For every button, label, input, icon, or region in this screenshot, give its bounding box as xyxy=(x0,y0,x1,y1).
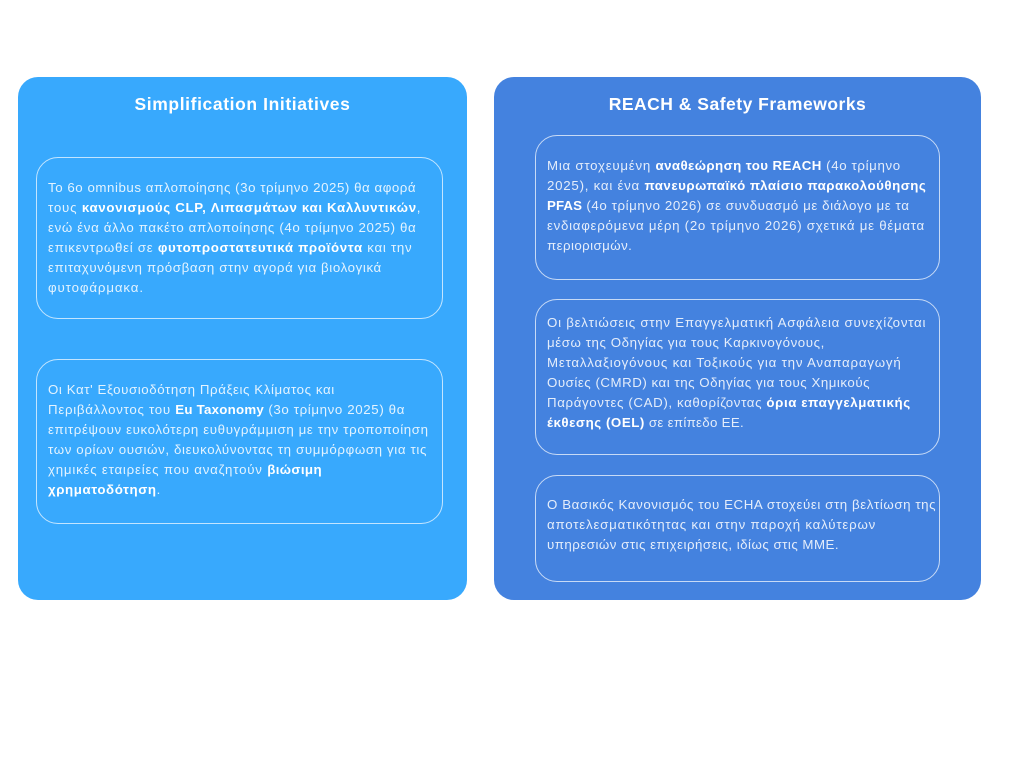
text: occupational safety: έκθεσης (OEL) σε επίπεδο ΕΕ. xyxy=(547,415,744,430)
card: eu taxonomy xyxy=(36,359,443,524)
text: 6th omnibus xyxy=(48,180,421,295)
text: echa regulation xyxy=(547,497,936,552)
text: 6th omnibus: τους κανονισμούς CLP, Λιπασμάτων και Καλλυντικών, xyxy=(48,200,421,215)
text: occupational safety: Οι βελτιώσεις στην Επαγγελματική Ασφάλεια συνεχίζονται xyxy=(547,315,926,330)
heading: reach and safety frameworks: REACH & Safety Frameworks xyxy=(609,94,866,114)
text: echa regulation: αποτελεσματικότητας και στην παροχή καλύτερων xyxy=(547,517,876,532)
text: 6th omnibus: επιταχυνόμενη πρόσβαση στην αγορά για βιολογικά xyxy=(48,260,382,275)
text: occupational safety: Παράγοντες (CAD), καθορίζοντας όρια επαγγελματικής xyxy=(547,395,911,410)
card: echa regulation xyxy=(535,475,940,582)
text: occupational safety: Ουσίες (CMRD) και της Οδηγίας για τους Χημικούς xyxy=(547,375,870,390)
text: 6th omnibus: Το 6ο omnibus απλοποίησης (3ο τρίμηνο 2025) θα αφορά xyxy=(48,180,416,195)
text: occupational safety: Μεταλλαξιογόνους και Τοξικούς για την Αναπαραγωγή xyxy=(547,355,902,370)
text: eu taxonomy: χημικές εταιρείες που αναζητούν βιώσιμη xyxy=(48,462,322,477)
text: echa regulation: υπηρεσιών στις επιχειρήσεις, ιδίως στις ΜΜΕ. xyxy=(547,537,839,552)
text: eu taxonomy: χρηματοδότηση. xyxy=(48,482,161,497)
text: eu taxonomy xyxy=(48,382,429,497)
text: 6th omnibus: φυτοφάρμακα. xyxy=(48,280,144,295)
heading: simplification initiatives: Simplification Initiatives xyxy=(135,94,350,114)
card: reach revision xyxy=(535,135,940,280)
text: 6th omnibus: ενώ ένα άλλο πακέτο απλοποίησης (4ο τρίμηνο 2025) θα xyxy=(48,220,416,235)
text: occupational safety: μέσω της Οδηγίας για τους Καρκινογόνους, xyxy=(547,335,825,350)
text: eu taxonomy: Περιβάλλοντος του Eu Taxonomy (3ο τρίμηνο 2025) θα xyxy=(48,402,405,417)
text: reach revision: PFAS (4ο τρίμηνο 2026) σε συνδυασμό με διάλογο με τα xyxy=(547,198,909,213)
panel: reach and safety frameworks xyxy=(494,77,981,600)
panel: simplification initiatives xyxy=(18,77,467,600)
text: reach revision: 2025), και ένα πανευρωπαϊκό πλαίσιο παρακολούθησης xyxy=(547,178,926,193)
text: reach revision: ενδιαφερόμενα μέρη (2ο τρίμηνο 2026) σχετικά με θέματα xyxy=(547,218,925,233)
text: eu taxonomy: Οι Κατ' Εξουσιοδότηση Πράξεις Κλίματος και xyxy=(48,382,335,397)
text: reach revision: περιορισμών. xyxy=(547,238,632,253)
text: 6th omnibus: επικεντρωθεί σε φυτοπροστατευτικά προϊόντα και την xyxy=(48,240,412,255)
text: occupational safety xyxy=(547,315,926,430)
text: reach revision xyxy=(547,158,926,253)
text: eu taxonomy: επιτρέψουν ευκολότερη ευθυγράμμιση με την τροποποίηση xyxy=(48,422,429,437)
text: echa regulation: Ο Βασικός Κανονισμός του ECHA στοχεύει στη βελτίωση της xyxy=(547,497,936,512)
text: eu taxonomy: των ορίων ουσιών, διευκολύνοντας τη συμμόρφωση για τις xyxy=(48,442,427,457)
text: reach revision: Μια στοχευμένη αναθεώρηση του REACH (4ο τρίμηνο xyxy=(547,158,901,173)
card: occupational safety xyxy=(535,299,940,455)
card: 6th omnibus xyxy=(36,157,443,319)
